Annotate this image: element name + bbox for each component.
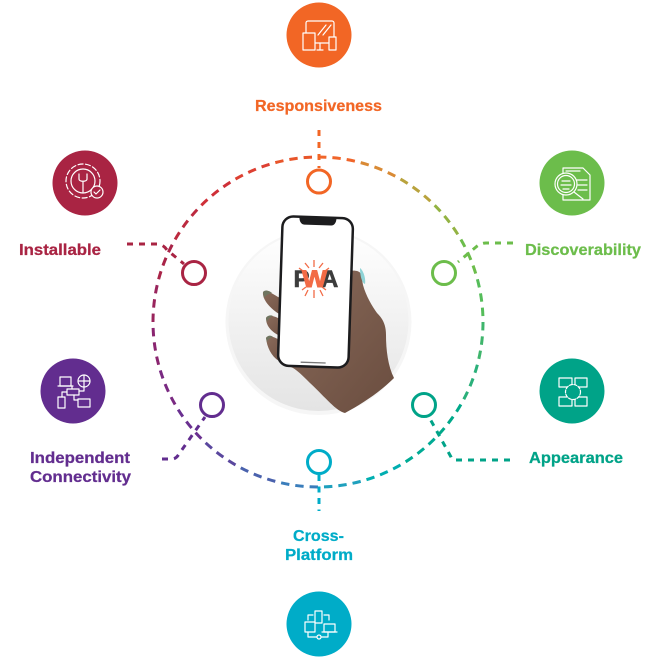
connector [127,244,184,264]
connector [318,130,320,168]
node: Cross-Platform [285,450,353,656]
label: Appearance [529,450,623,467]
icon: connected devices [40,358,106,424]
phone [277,215,354,369]
node: Independent Connectivity [30,358,224,486]
label [285,528,353,564]
label: Independent [30,450,130,467]
label: Responsiveness [255,98,382,115]
icon: responsive devices [286,2,352,68]
icon: linked devices [286,592,352,656]
hand holding phone [263,215,394,413]
icon: gear and wrench [52,150,118,216]
label: Cross- [293,528,344,545]
connector [429,417,510,460]
connector [318,475,320,511]
dashed colour ring [148,152,488,492]
PWA logo: W [302,266,327,293]
node: Appearance [412,358,623,467]
thumb nail [360,268,365,284]
hand [263,271,394,413]
node: Installable [19,150,206,284]
PWA logo: P [294,266,310,293]
icon: document and magnifier [540,150,604,216]
label: Platform [285,547,353,564]
icon: layout and gear [540,358,604,424]
ring marker [308,450,330,474]
ring marker [412,394,436,416]
label [30,450,131,486]
connector [162,417,205,459]
ring marker [432,262,456,284]
ring marker [200,394,224,416]
node: Discoverability [432,150,641,284]
PWA logo: A [321,266,338,293]
connector [458,243,513,262]
label: Discoverability [525,242,641,259]
label: Connectivity [30,469,131,486]
label: Installable [19,242,101,259]
ring marker [182,262,206,284]
ring marker [308,170,330,193]
central gradient disc [226,229,412,415]
PWA logo [294,260,338,298]
node: Responsiveness [255,2,382,193]
